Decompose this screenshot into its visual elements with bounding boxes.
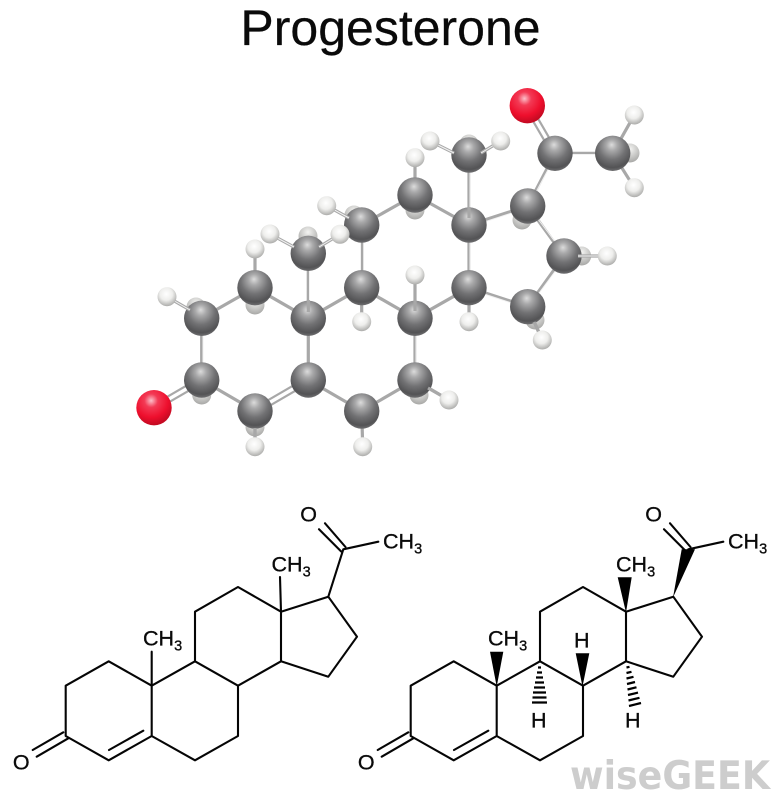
bonds bbox=[153, 104, 634, 447]
ring bonds bbox=[378, 523, 723, 760]
atom labels: O bbox=[13, 750, 30, 774]
atom labels: O bbox=[300, 502, 317, 526]
bond stubs over atoms bbox=[167, 141, 607, 438]
atom labels: 3 bbox=[647, 565, 655, 581]
oxygen atoms bbox=[136, 88, 545, 425]
hydrogen atoms behind carbons bbox=[186, 134, 640, 436]
skeletal formula: left bbox=[13, 502, 422, 774]
atom labels: 3 bbox=[303, 565, 311, 581]
title: Progesterone bbox=[240, 0, 541, 56]
hashed wedges bbox=[532, 667, 641, 706]
atom labels: H bbox=[531, 708, 547, 732]
atom labels: CH bbox=[616, 553, 647, 577]
3D ball-and-stick model bbox=[136, 88, 644, 456]
atom labels: H bbox=[625, 708, 641, 732]
carbon atoms bbox=[184, 136, 630, 429]
atom labels: CH bbox=[488, 627, 519, 651]
atom labels: CH bbox=[728, 529, 759, 553]
atom labels: H bbox=[574, 628, 590, 652]
watermark logo: wiseGEEK bbox=[570, 754, 772, 799]
solid wedges bbox=[490, 549, 695, 686]
atom labels: 3 bbox=[519, 639, 527, 655]
atom labels: CH bbox=[143, 627, 174, 651]
atom labels bbox=[358, 502, 767, 774]
atom labels: CH bbox=[383, 529, 414, 553]
hydrogen atoms in front bbox=[158, 106, 644, 456]
atom labels: O bbox=[645, 502, 662, 526]
atom labels bbox=[13, 502, 422, 774]
atom labels: 3 bbox=[174, 639, 182, 655]
atom labels: 3 bbox=[414, 541, 422, 557]
atom labels: O bbox=[358, 750, 375, 774]
atom labels: CH bbox=[272, 553, 303, 577]
ring bonds bbox=[33, 523, 378, 760]
skeletal formula: right with stereochemistry bbox=[358, 502, 767, 774]
atom labels: 3 bbox=[759, 541, 767, 557]
